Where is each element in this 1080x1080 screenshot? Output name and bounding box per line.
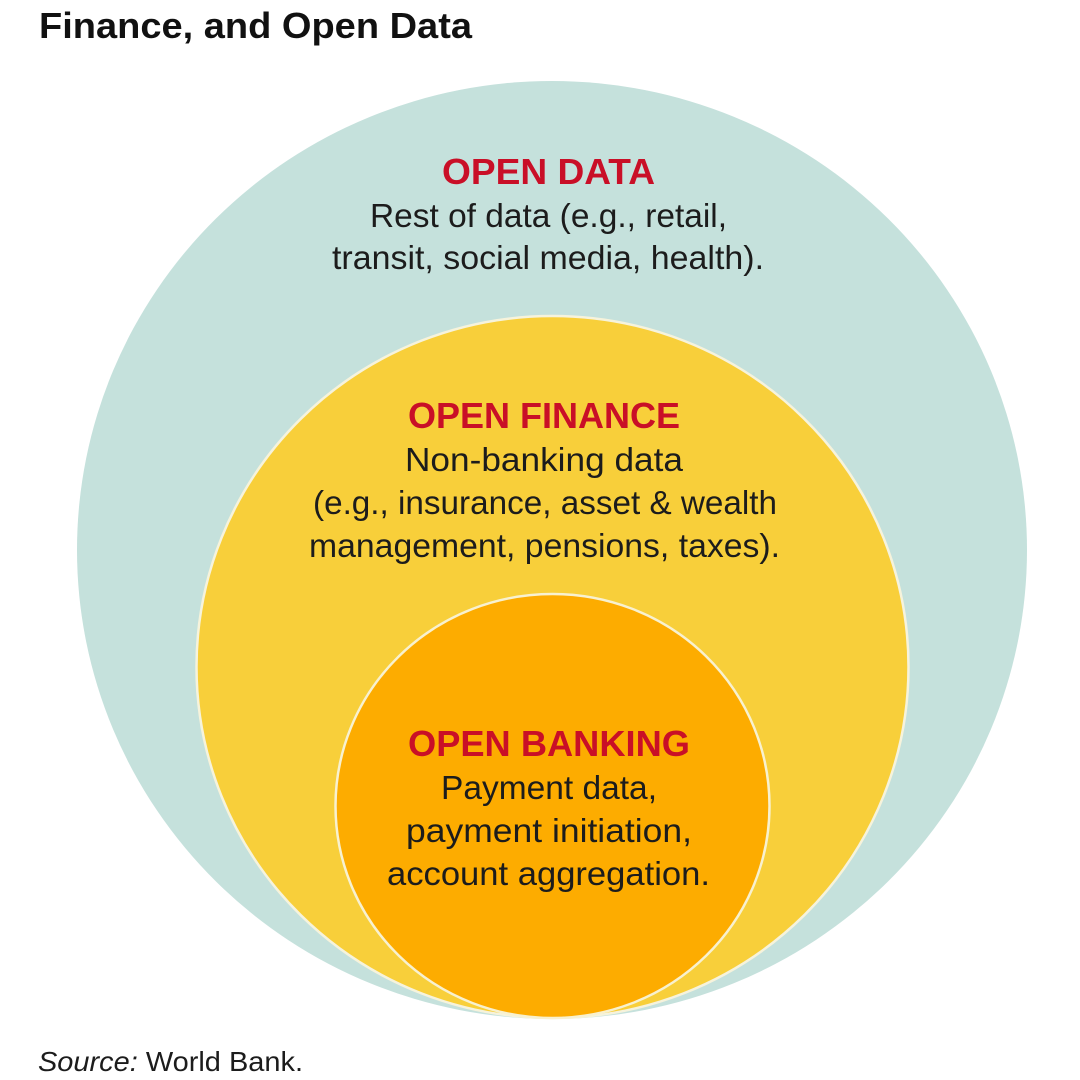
open banking heading: OPEN BANKING [408,723,690,764]
open finance description: management, pensions, taxes). [309,527,780,564]
open data description: transit, social media, health). [332,239,764,276]
panel: open banking circle [336,594,770,1018]
open data description: Rest of data (e.g., retail, [370,197,727,234]
open finance heading: OPEN FINANCE [408,395,680,436]
open finance description [309,441,780,564]
open banking description [387,769,710,892]
open banking description: Payment data, [441,769,657,806]
open data heading: OPEN DATA [442,151,655,192]
title: Finance, and Open Data [39,5,473,46]
source note: Source: World Bank. [38,1046,303,1077]
panel: open finance circle [196,316,908,1018]
open banking description: account aggregation. [387,855,710,892]
open finance description: (e.g., insurance, asset & wealth [313,484,777,521]
open finance description: Non-banking data [405,441,684,478]
open banking description: payment initiation, [406,812,692,849]
open data description [332,197,764,276]
panel: open data circle [77,81,1027,1019]
